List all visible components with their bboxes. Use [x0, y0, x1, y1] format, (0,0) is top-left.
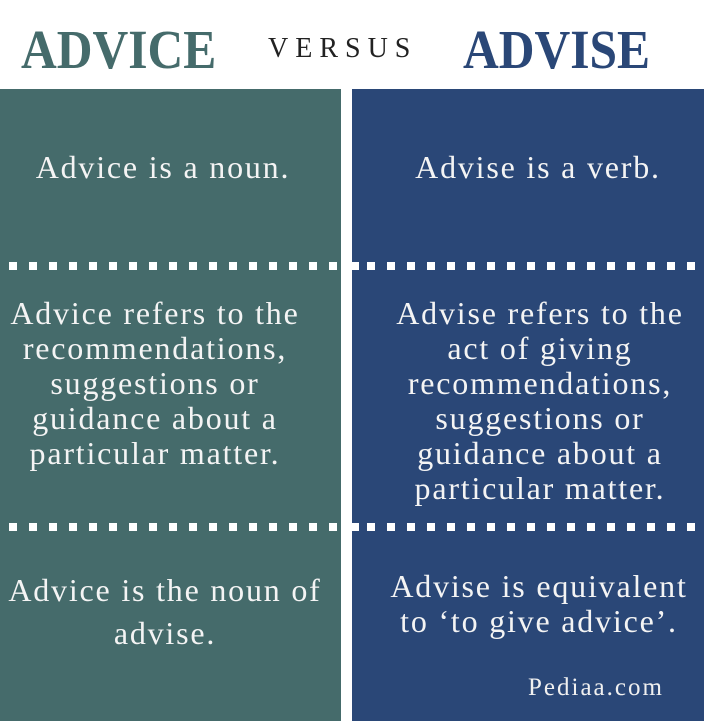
text: advice definition: recommendations, [23, 330, 287, 366]
text: advise definition: suggestions or [435, 400, 645, 436]
text: noun of advise [8, 572, 322, 651]
text: advise definition: particular matter. [415, 470, 665, 506]
text: advise definition: recommendations, [408, 365, 672, 401]
text: advise definition [396, 295, 684, 506]
text: advice definition: Advice refers to the [10, 295, 300, 331]
title: ADVISE: ADVISE [463, 19, 650, 80]
title: VERSUS: VERSUS [268, 33, 417, 64]
text: verb: Advise is a verb. [415, 149, 661, 185]
text: advice definition: particular matter. [30, 435, 280, 471]
text: noun of advise: Advice is the noun of [8, 572, 322, 608]
text: equivalent: to ‘to give advice’. [400, 603, 678, 639]
text: equivalent [390, 568, 688, 639]
text: advice definition [10, 295, 300, 471]
watermark: Pediaa.com [528, 674, 664, 701]
text: advise definition: Advise refers to the [396, 295, 684, 331]
panel: advise [352, 89, 704, 721]
text: advice definition: suggestions or [50, 365, 260, 401]
title: ADVICE: ADVICE [21, 19, 216, 80]
text: advise definition: guidance about a [417, 435, 663, 471]
text: advice definition: guidance about a [32, 400, 278, 436]
text: equivalent: Advise is equivalent [390, 568, 688, 604]
panel: advice [0, 89, 341, 721]
text: advise definition: act of giving [447, 330, 633, 366]
text: noun: Advice is a noun. [36, 149, 290, 185]
text: noun of advise: advise. [114, 615, 216, 651]
